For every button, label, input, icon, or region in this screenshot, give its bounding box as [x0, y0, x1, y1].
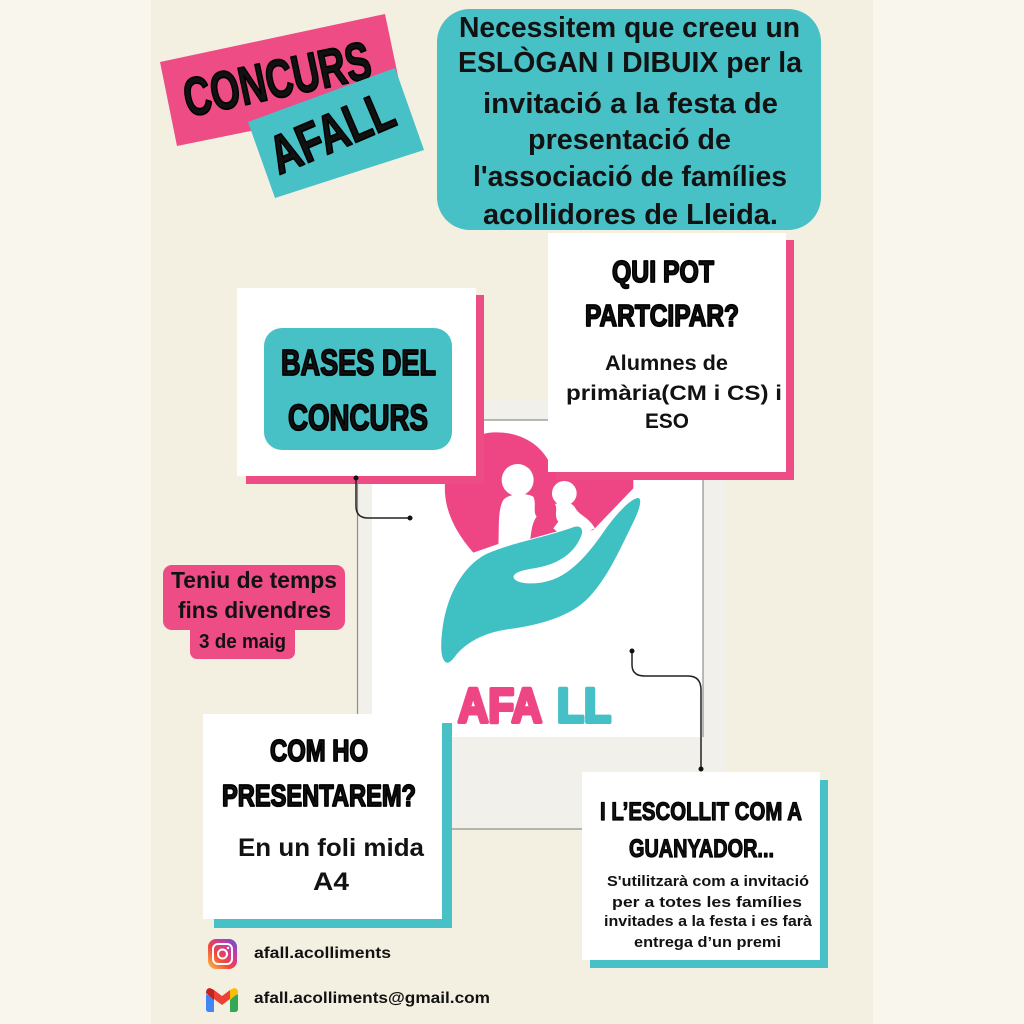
AFALL logo	[441, 432, 641, 733]
central poster background	[151, 0, 873, 1024]
intro bubble: l'associació de famílies	[473, 161, 787, 193]
logo: family figures	[498, 464, 595, 547]
card: guanyador: invitades a la festa i es farà	[604, 913, 813, 930]
logo: wordmark: AFA	[458, 680, 542, 733]
card: qui pot participar	[548, 233, 794, 480]
card: qui pot participar: Alumnes de	[605, 352, 728, 375]
card: qui pot participar: primària(CM i CS) i	[566, 382, 782, 405]
icon: gmail	[206, 988, 238, 1012]
card: com ho presentarem: A4	[313, 868, 349, 896]
deadline callout: Teniu de temps	[171, 567, 337, 593]
card: qui pot participar: PARTCIPAR?	[585, 298, 739, 333]
card: com ho presentarem: En un foli mida	[238, 834, 425, 862]
title: concurs	[160, 14, 403, 146]
connector: logo to winner	[630, 648, 704, 772]
intro bubble	[437, 9, 821, 231]
logo: hand	[441, 497, 641, 663]
intro bubble: Necessitem que creeu un	[459, 12, 800, 44]
card: guanyador: entrega d’un premi	[634, 934, 781, 951]
card: com ho presentarem: COM HO	[270, 733, 368, 768]
card: guanyador	[582, 772, 828, 968]
card: com ho presentarem	[203, 714, 452, 928]
card: bases del concurs	[237, 288, 484, 484]
logo: wordmark: LL	[557, 680, 611, 733]
intro bubble: invitació a la festa de	[483, 88, 778, 120]
intro bubble: presentació de	[528, 124, 731, 156]
logo: wordmark	[458, 680, 611, 733]
card: bases del concurs: CONCURS	[288, 397, 428, 438]
text: email: afall.acolliments@gmail.com	[254, 990, 490, 1007]
icon: instagram	[208, 939, 237, 969]
connector: bases to logo	[354, 476, 412, 520]
logo: heart	[441, 432, 641, 663]
title: afall: AFALL	[260, 80, 403, 186]
card: guanyador: I L’ESCOLLIT COM A	[600, 798, 802, 826]
photo frame behind logo	[357, 400, 725, 829]
intro bubble: acollidores de Lleida.	[483, 199, 778, 231]
deadline callout: 3 de maig	[199, 631, 286, 653]
card: qui pot participar: ESO	[645, 410, 689, 433]
deadline callout	[163, 565, 345, 659]
intro bubble: ESLÒGAN I DIBUIX per la	[458, 45, 803, 79]
title: concurs: CONCURS	[178, 31, 376, 129]
card: guanyador: GUANYADOR...	[629, 835, 774, 863]
text: instagram handle: afall.acolliments	[254, 945, 391, 962]
card: bases del concurs: BASES DEL	[281, 342, 436, 383]
card: qui pot participar: QUI POT	[612, 254, 714, 289]
deadline callout: fins divendres	[178, 597, 331, 623]
card: com ho presentarem: PRESENTAREM?	[222, 778, 416, 813]
card: guanyador: per a totes les famílies	[612, 894, 802, 911]
card: guanyador: S'utilitzarà com a invitació	[607, 873, 809, 890]
